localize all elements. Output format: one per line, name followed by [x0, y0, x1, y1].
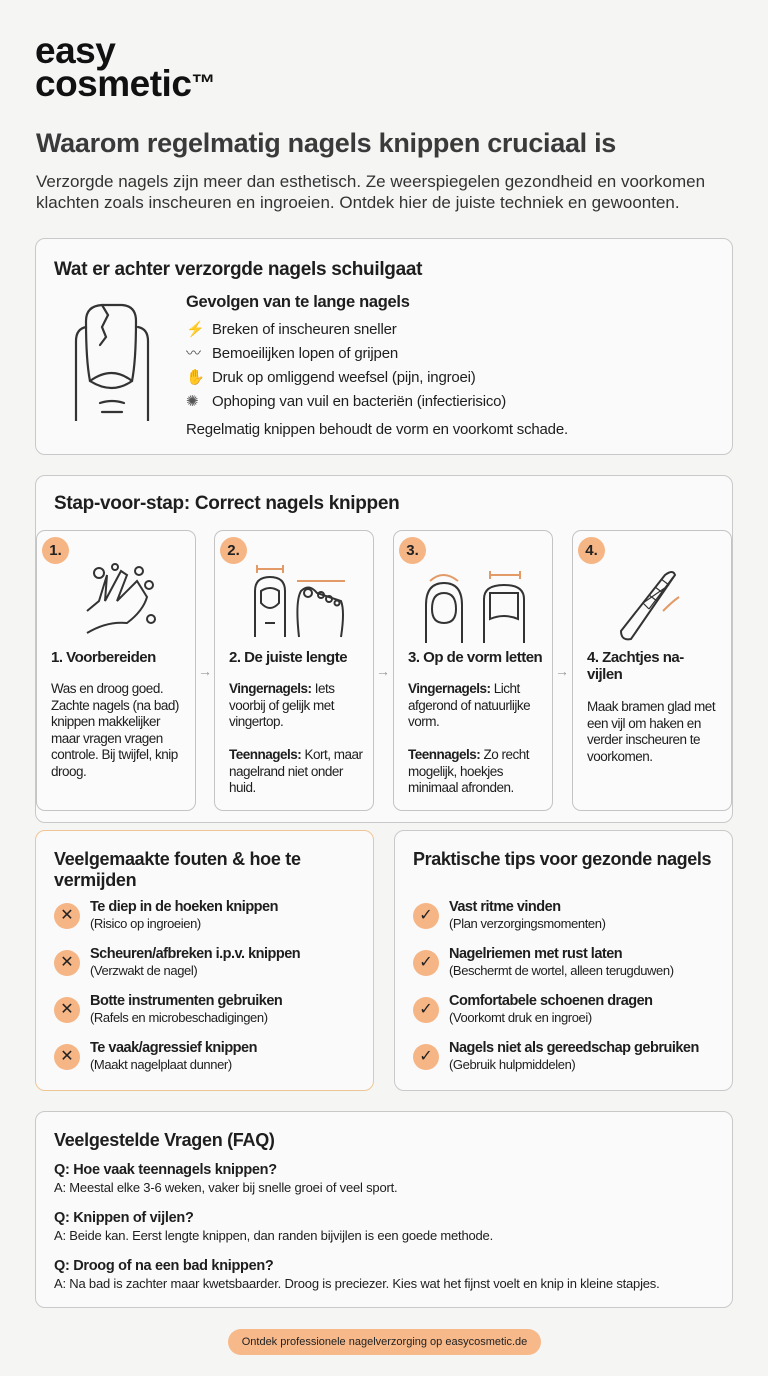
- card 3: Vingernagels: Licht afgerond of natuurlijke vorm.: [408, 681, 530, 729]
- panel: tips: (Voorkomt druk en ingroei): [449, 1010, 592, 1025]
- consequences list: Ophoping van vuil en bacteriën (infectierisico): [212, 393, 506, 410]
- panel: tips: Comfortabele schoenen dragen: [449, 993, 653, 1009]
- icon: finger and toes: [254, 565, 345, 638]
- panel: mistakes: (Risico op ingroeien): [90, 916, 201, 931]
- arrow: →: [376, 663, 390, 679]
- logo: easy: [35, 30, 115, 71]
- panel: tips: ✓: [419, 954, 433, 971]
- icon: washing hands: [86, 563, 156, 634]
- panel: tips: ✓: [419, 907, 433, 924]
- tip 2: [413, 946, 674, 978]
- logo: [35, 30, 215, 104]
- icon: finger with cracked nail: [74, 304, 150, 421]
- consequences list: Druk op omliggend weefsel (pijn, ingroei): [212, 369, 476, 386]
- tip 4: [413, 1040, 699, 1072]
- faq items: Q: Droog of na een bad knippen?: [54, 1258, 273, 1274]
- card 1: 1.: [49, 542, 62, 559]
- icon: nail file: [620, 571, 680, 640]
- card 2: Teennagels: Kort, maar nagelrand niet onder huid.: [229, 747, 363, 795]
- panel: mistakes: Botte instrumenten gebruiken: [90, 993, 282, 1009]
- panel: mistakes: (Verzwakt de nagel): [90, 963, 197, 978]
- card 3: [393, 530, 553, 811]
- arrow: →: [198, 663, 212, 679]
- panel: mistakes: ✕: [60, 1048, 74, 1065]
- card 4: [572, 530, 732, 811]
- panel: mistakes: Te diep in de hoeken knippen: [90, 899, 278, 915]
- card 4: Maak bramen glad met een vijl om haken en verder inscheuren te voorkomen.: [587, 699, 715, 764]
- tip 1: [413, 899, 606, 931]
- panel: mistakes: (Maakt nagelplaat dunner): [90, 1057, 232, 1072]
- faq items: A: Na bad is zachter maar kwetsbaarder. Droog is preciezer. Kies wat het fijnst voelt en knip in kleine stapjes.: [54, 1276, 660, 1291]
- mistake 4: [54, 1040, 257, 1072]
- panel: mistakes: (Rafels en microbeschadigingen): [90, 1010, 268, 1025]
- mistake 2: [54, 946, 300, 978]
- footer button: [228, 1329, 541, 1355]
- panel: tips: Vast ritme vinden: [449, 899, 561, 915]
- card 2: 2.: [227, 542, 240, 559]
- panel: tips: (Beschermt de wortel, alleen terugduwen): [449, 963, 674, 978]
- card 1: 1. Voorbereiden: [51, 649, 156, 666]
- panel: mistakes: ✕: [60, 954, 74, 971]
- arrow: →: [555, 663, 569, 679]
- card 4: 4.: [585, 542, 598, 559]
- card 3: 3.: [406, 542, 419, 559]
- panel: mistakes: Te vaak/agressief knippen: [90, 1040, 257, 1056]
- panel: tips: ✓: [419, 1048, 433, 1065]
- consequences list: [186, 293, 568, 438]
- heading: Wat er achter verzorgde nagels schuilgaat: [54, 259, 422, 280]
- card 2: [214, 530, 374, 811]
- panel: mistakes: [35, 830, 374, 1091]
- card 3: 3. Op de vorm letten: [408, 649, 542, 666]
- panel: mistakes: Scheuren/afbreken i.p.v. knippen: [90, 946, 300, 962]
- faq items: A: Beide kan. Eerst lengte knippen, dan randen bijvijlen is een goede methode.: [54, 1228, 493, 1243]
- panel: tips: (Gebruik hulpmiddelen): [449, 1057, 575, 1072]
- card 1: [36, 530, 196, 811]
- faq items: A: Meestal elke 3-6 weken, vaker bij snelle groei of veel sport.: [54, 1180, 397, 1195]
- card 2: Vingernagels: Iets voorbij of gelijk met vingertop.: [229, 681, 335, 729]
- icon: nail shapes: [425, 571, 525, 643]
- panel: tips: [394, 830, 733, 1091]
- mistake 1: [54, 899, 278, 931]
- consequences list: Bemoeilijken lopen of grijpen: [212, 345, 398, 362]
- panel: mistakes: ✕: [60, 1001, 74, 1018]
- card 3: Teennagels: Zo recht mogelijk, hoekjes minimaal afronden.: [408, 747, 529, 795]
- logo: cosmetic™: [35, 63, 215, 104]
- card 1: Was en droog goed. Zachte nagels (na bad) knippen makkelijker maar vragen vragen controle. Bij twijfel, knip droog.: [51, 681, 179, 778]
- panel: what lies behind: [35, 238, 733, 455]
- panel: tips: ✓: [419, 1001, 433, 1018]
- consequences list: ⚡: [186, 321, 204, 338]
- consequences list: Breken of inscheuren sneller: [212, 321, 397, 338]
- consequences list: ✺: [186, 393, 198, 410]
- intro text: Verzorgde nagels zijn meer dan esthetisch. Ze weerspiegelen gezondheid en voorkomen klachten zoals inscheuren en ingroeien. Ontdek hier de juiste techniek en gewoonten.: [36, 172, 705, 212]
- panel: tips: (Plan verzorgingsmomenten): [449, 916, 606, 931]
- panel: FAQ: [35, 1111, 733, 1308]
- consequences list: 〰: [186, 345, 201, 362]
- panel: tips: Nagels niet als gereedschap gebruiken: [449, 1040, 699, 1056]
- panel: step by step: [35, 475, 733, 823]
- consequences list: Regelmatig knippen behoudt de vorm en voorkomt schade.: [186, 421, 568, 438]
- tip 3: [413, 993, 653, 1025]
- card 4: 4. Zachtjes na-: [587, 649, 684, 666]
- heading: Veelgestelde Vragen (FAQ): [54, 1130, 275, 1150]
- title: Waarom regelmatig nagels knippen cruciaal is: [36, 128, 616, 158]
- faq items: [54, 1162, 660, 1291]
- heading: Veelgemaakte fouten & hoe te vermijden: [54, 849, 301, 890]
- footer button: Ontdek professionele nagelverzorging op easycosmetic.de: [242, 1336, 527, 1348]
- faq items: Q: Hoe vaak teennagels knippen?: [54, 1162, 277, 1178]
- mistake 3: [54, 993, 282, 1025]
- heading: Stap-voor-stap: Correct nagels knippen: [54, 493, 399, 514]
- panel: mistakes: ✕: [60, 907, 74, 924]
- card 2: 2. De juiste lengte: [229, 649, 347, 666]
- faq items: Q: Knippen of vijlen?: [54, 1210, 194, 1226]
- heading: Praktische tips voor gezonde nagels: [413, 849, 711, 869]
- card 4: vijlen: [587, 666, 622, 683]
- consequences list: ✋: [186, 369, 204, 386]
- consequences list: Gevolgen van te lange nagels: [186, 293, 410, 311]
- panel: tips: Nagelriemen met rust laten: [449, 946, 622, 962]
